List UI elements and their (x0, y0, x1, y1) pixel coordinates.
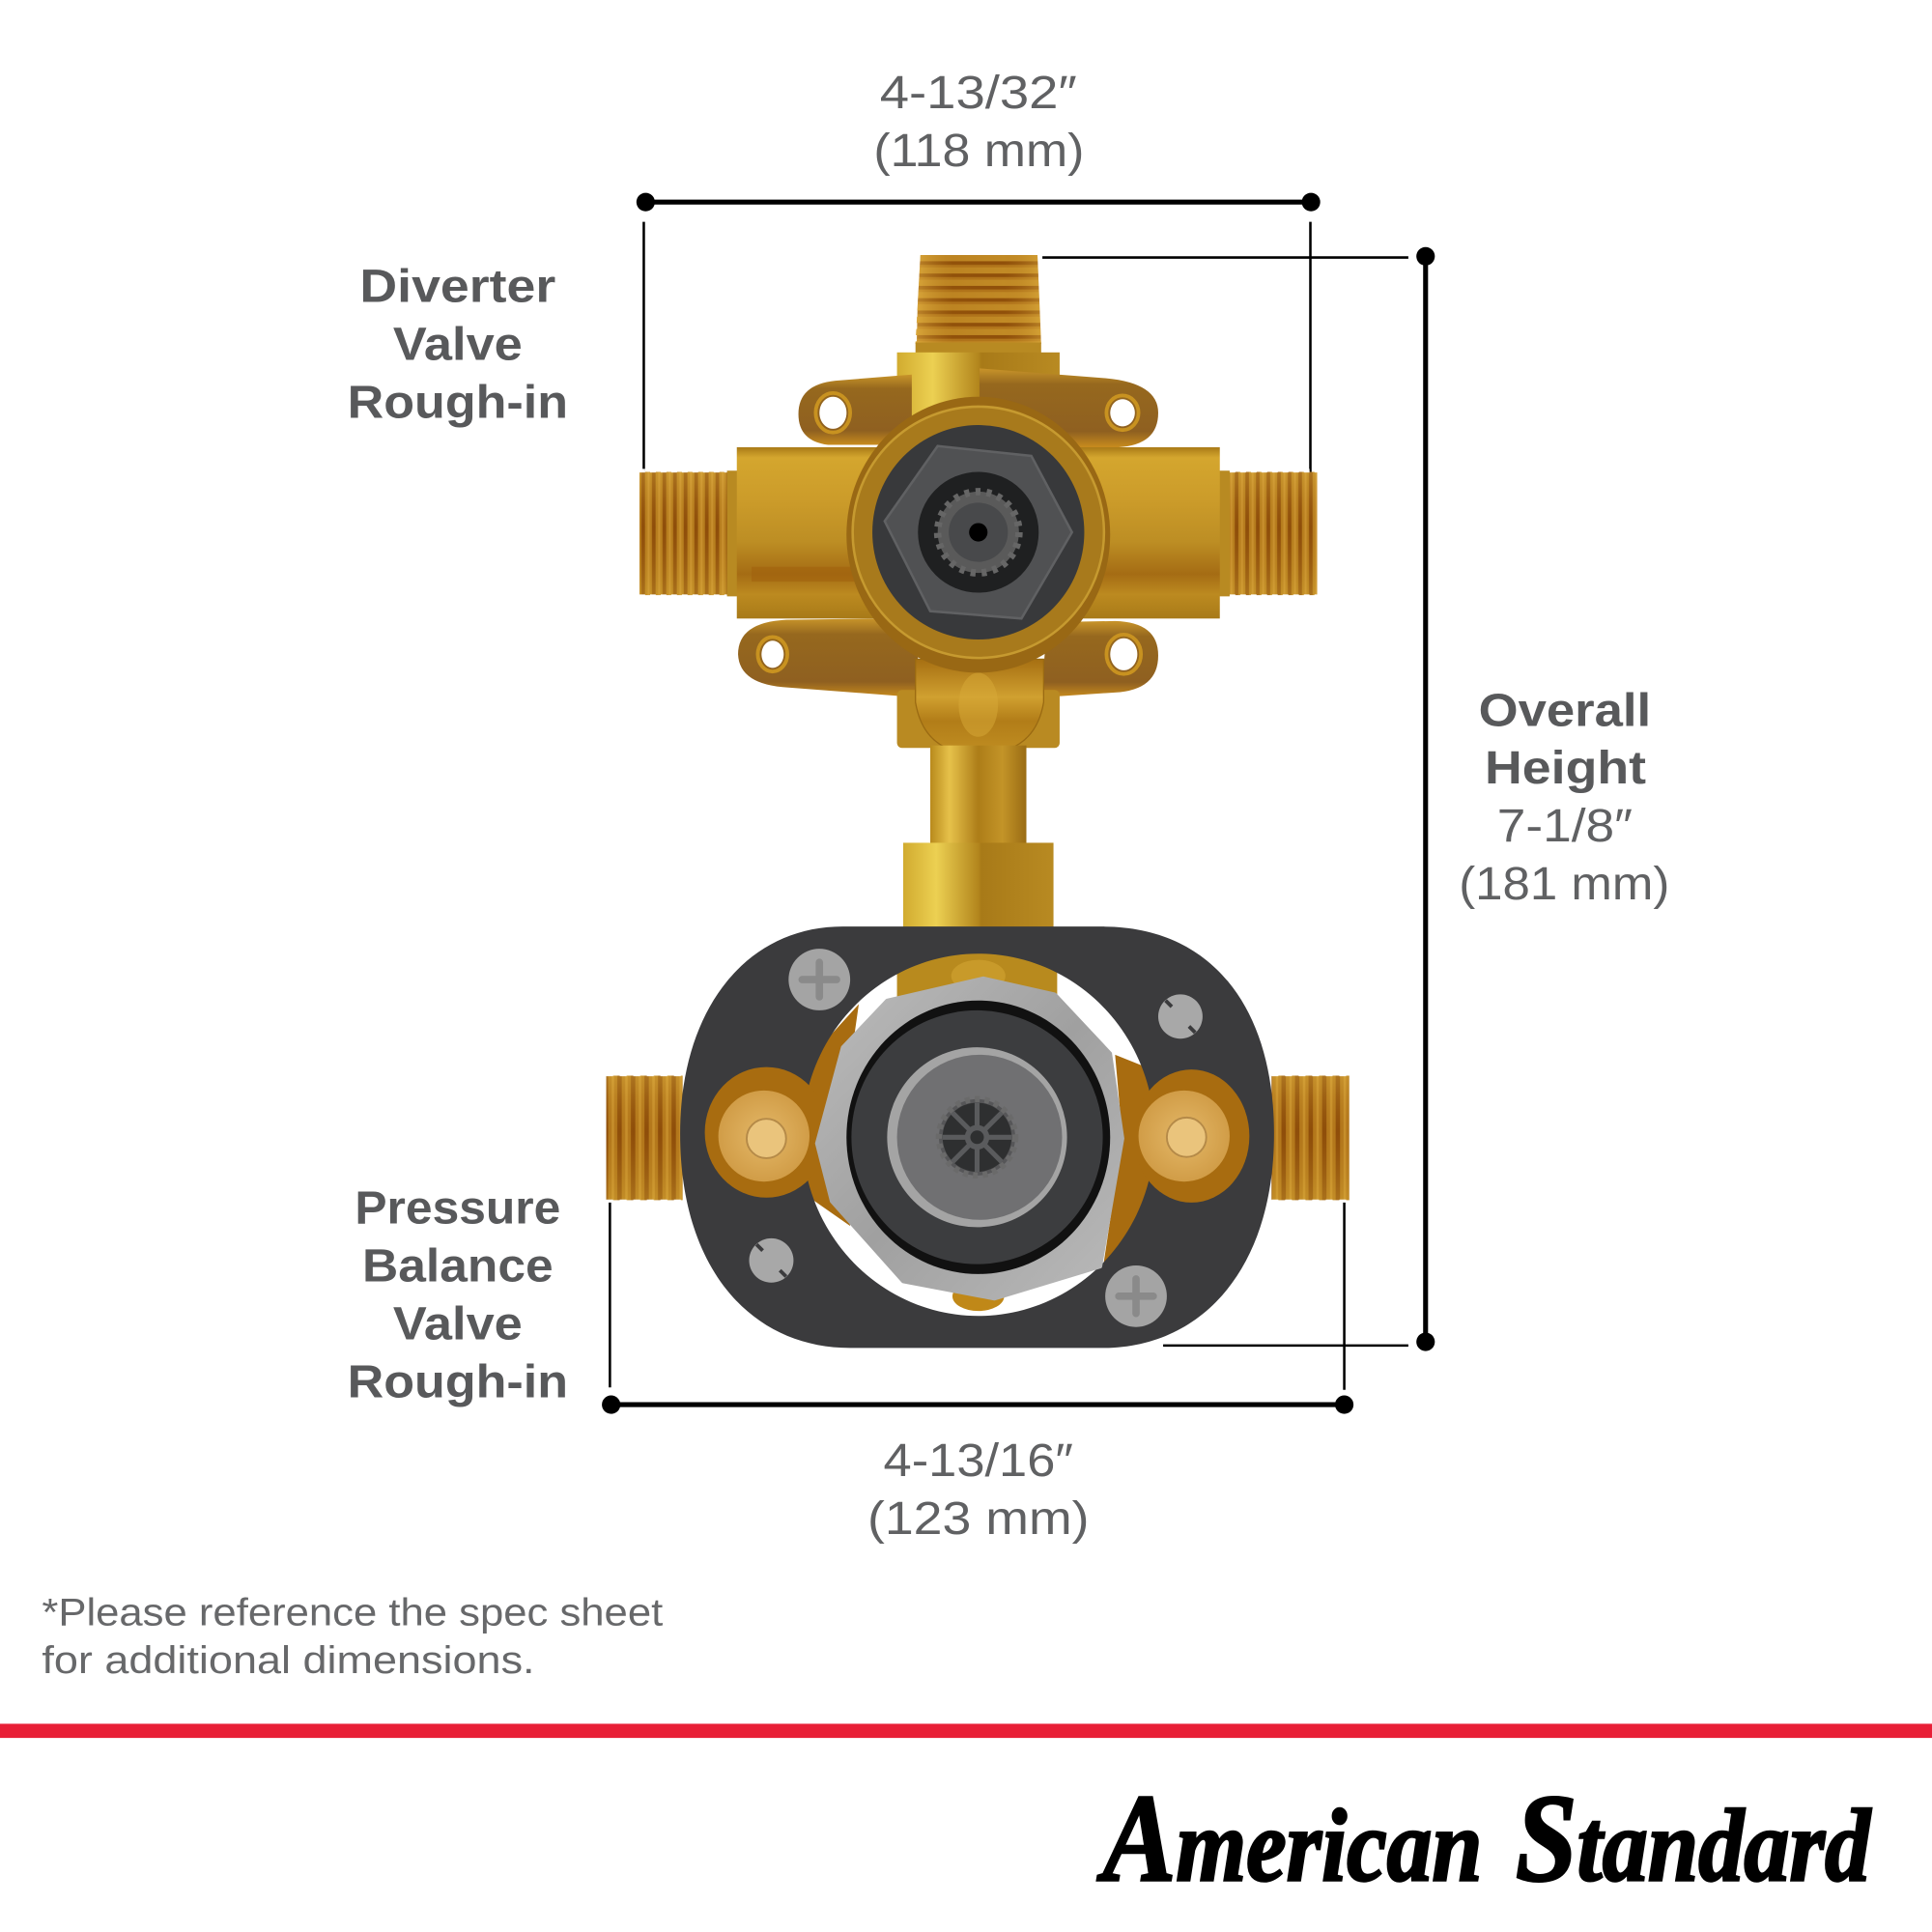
label: overall height (1459, 684, 1669, 910)
illustration: diverter valve (639, 255, 1318, 754)
left plug (705, 1067, 828, 1198)
black seal ring (846, 1001, 1110, 1274)
dimension line: bottom width (602, 1203, 1353, 1414)
dimension label: bottom width (867, 1435, 1090, 1545)
footnote: for additional dimensions. (42, 1639, 535, 1682)
heading: pressure balance valve rough-in: Pressure (355, 1182, 560, 1235)
heading: diverter valve rough-in (348, 261, 568, 428)
centre cartridge (846, 397, 1110, 672)
label: overall height: (181 mm) (1459, 858, 1669, 910)
right plug (1133, 1069, 1249, 1203)
mounting ears (738, 368, 1158, 697)
side threaded inlets (607, 1074, 1350, 1202)
lower elbow (897, 659, 1060, 754)
label: overall height: Overall (1479, 684, 1651, 736)
heading: pressure balance valve rough-in: Balance (362, 1240, 554, 1293)
heading: pressure balance valve rough-in (348, 1182, 568, 1407)
dimension label: bottom width: (123 mm) (867, 1492, 1090, 1545)
illustration: pipe connector (903, 746, 1054, 929)
brass body (737, 447, 1220, 618)
red divider bar (0, 1723, 1932, 1738)
label: overall height: Height (1485, 742, 1646, 794)
top collar (897, 353, 1060, 426)
heading: diverter valve rough-in: Diverter (359, 260, 555, 312)
dimension label: bottom width: 4-13/16″ (884, 1435, 1073, 1487)
dimension line: top width (637, 193, 1321, 472)
screw: top right (1158, 994, 1203, 1038)
heading: pressure balance valve rough-in: Rough-in (348, 1355, 568, 1407)
heading: diverter valve rough-in: Valve (393, 318, 523, 370)
logo: American Standard: Standard (1516, 1769, 1871, 1908)
dark cartridge (851, 1010, 1103, 1264)
brass behind the plate (788, 952, 1158, 1311)
dimension label: top width (873, 67, 1084, 177)
footnote: *Please reference the spec sheet (42, 1591, 663, 1634)
dimension line: overall height (1042, 247, 1435, 1351)
top threaded outlet (915, 255, 1043, 355)
logo: American Standard (1096, 1769, 1871, 1908)
illustration: pressure balance valve (607, 926, 1350, 1348)
dimension label: top width: (118 mm) (873, 125, 1084, 177)
side threaded inlets (639, 470, 1318, 596)
screw: top left (788, 949, 850, 1010)
grey stem disc (887, 1047, 1067, 1227)
dimension label: top width: 4-13/32″ (880, 67, 1077, 119)
screw: bottom left (750, 1238, 793, 1283)
label: overall height: 7-1/8″ (1497, 800, 1633, 852)
heading: diverter valve rough-in: Rough-in (348, 376, 568, 428)
logo: American Standard: American (1096, 1769, 1482, 1908)
mounting plate (680, 926, 1274, 1348)
footnote (42, 1591, 663, 1682)
screw: bottom right (1105, 1265, 1167, 1327)
gear stem (939, 1099, 1015, 1176)
silver hex nut (817, 979, 1122, 1298)
heading: pressure balance valve rough-in: Valve (393, 1297, 523, 1350)
